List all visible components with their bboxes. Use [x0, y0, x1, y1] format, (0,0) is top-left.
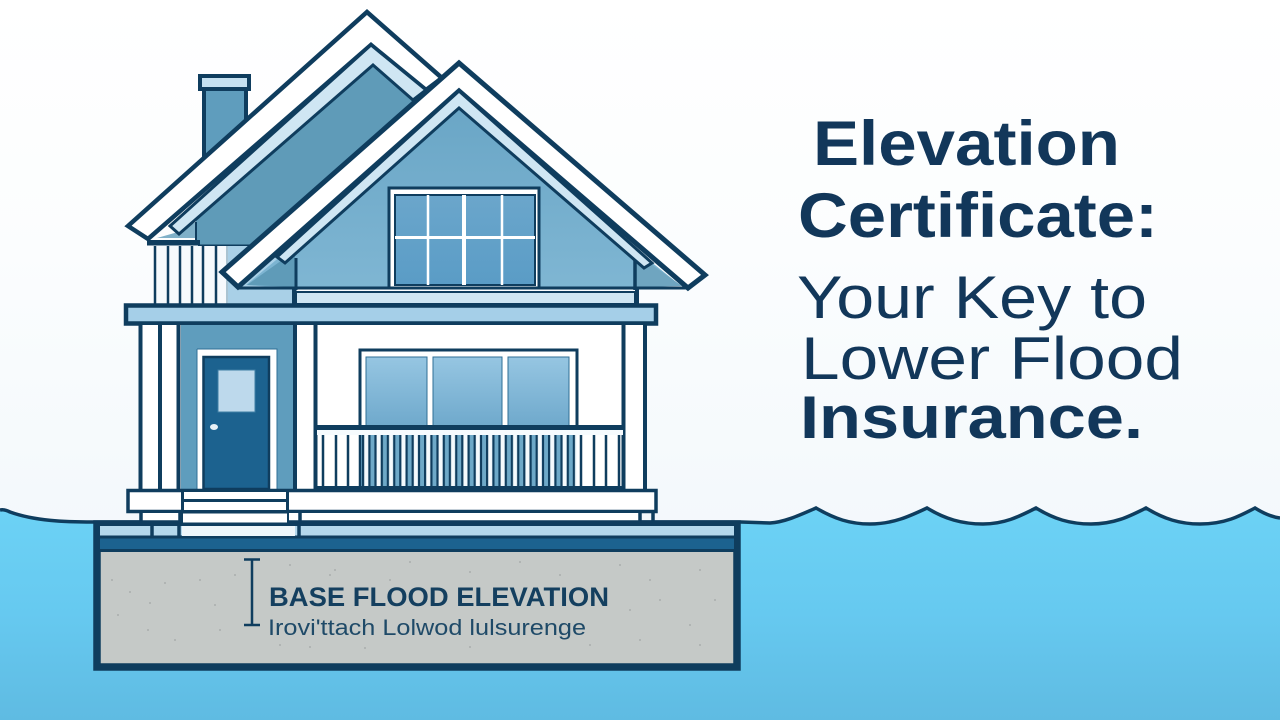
base flood elevation marker: [244, 559, 260, 625]
house illustration: [97, 12, 737, 667]
label: garbled subtext: Irovi'ttach Lolwod lulsurenge: [268, 615, 586, 640]
back roof section: [128, 12, 442, 246]
entry door: [197, 349, 277, 490]
porch railing: [317, 425, 623, 490]
frieze band: [292, 288, 639, 305]
chimney: [200, 76, 249, 163]
porch deck: [128, 490, 656, 512]
title line: Insurance: Insurance.: [800, 384, 1143, 451]
title line: Lower Flood: Lower Flood: [801, 325, 1183, 392]
title line: Certificate: Certificate:: [798, 181, 1158, 251]
title line: Your Key to: Your Key to: [797, 264, 1147, 331]
attic window: [389, 188, 539, 288]
front gable wall: [246, 108, 682, 290]
front roof: [222, 63, 705, 288]
concrete specks: [111, 561, 716, 649]
left upper balusters: [155, 246, 292, 305]
porch wall and columns: [140, 325, 646, 490]
deck footing: [141, 512, 653, 523]
foundation wall: [97, 523, 737, 667]
title: [797, 109, 1183, 451]
title line: Elevation: Elevation: [813, 109, 1120, 179]
porch beam: [126, 306, 656, 324]
flood water: [0, 508, 1280, 720]
label: base flood elevation: BASE FLOOD ELEVATION: [269, 582, 609, 612]
front steps: [181, 490, 295, 536]
porch window: [360, 350, 577, 428]
